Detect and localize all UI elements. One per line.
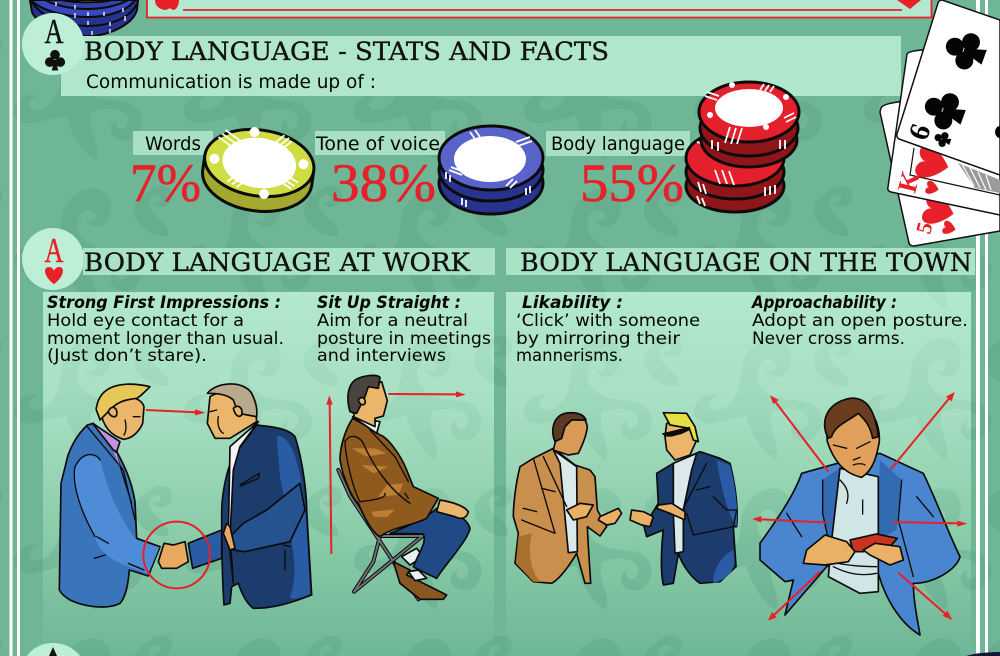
stat: body language: 55%	[580, 153, 684, 213]
folding chair	[338, 470, 425, 599]
six of clubs card	[897, 0, 1000, 175]
king of hearts card	[888, 50, 1000, 215]
stat: tone of voice: 38%	[331, 153, 436, 213]
king of hearts card: K	[892, 168, 926, 195]
sunglasses man	[630, 413, 737, 585]
arrow: lower left	[768, 572, 820, 621]
tip: strong first impressions	[47, 293, 284, 366]
stat: words	[130, 131, 213, 213]
fanned playing cards	[880, 0, 1000, 246]
arrow: upper right	[891, 392, 955, 469]
town heading banner: BODY LANGUAGE ON THE TOWN	[520, 248, 972, 277]
five of hearts card	[880, 80, 1000, 246]
tip: likability: by mirroring their	[516, 329, 680, 349]
tip: likability: mannerisms.	[516, 346, 623, 366]
green poker chip	[198, 121, 319, 218]
seated posture illustration	[326, 375, 470, 599]
arrow: lower right	[898, 573, 952, 620]
panel: on the town	[506, 292, 971, 655]
arrow: eye contact	[146, 409, 205, 415]
arrow: gaze line	[388, 391, 466, 397]
top card panel fragment	[147, 0, 932, 18]
stat: words: 7%	[130, 153, 201, 213]
top blue chip stack	[30, 0, 138, 36]
right border stripes	[976, 0, 988, 656]
panel: at work	[43, 292, 494, 655]
five of hearts card: 5	[911, 219, 938, 236]
tip: approachability: Approachability :	[750, 293, 897, 313]
handshake hands	[158, 542, 188, 568]
stats banner	[61, 36, 901, 96]
club icon	[45, 50, 65, 70]
gray-haired man	[188, 384, 312, 608]
stats intro: Communication is made up of :	[86, 71, 376, 93]
heart icon	[45, 267, 63, 284]
conversation illustration	[513, 392, 967, 635]
arrow: vertical back line	[326, 395, 333, 554]
tip: strong first impressions: Hold eye contact for a	[47, 311, 244, 331]
seated man	[340, 375, 470, 599]
tip: approachability: Never cross arms.	[752, 329, 905, 349]
tip: sit up straight	[317, 293, 491, 366]
blue poker chip	[439, 126, 543, 214]
upper red stack	[699, 82, 799, 167]
stat: tone of voice	[315, 131, 445, 213]
arrow: upper left	[770, 395, 828, 472]
stat: body language: Body language	[551, 133, 685, 155]
arrow: left	[752, 516, 828, 523]
red poker chip stacks	[686, 82, 799, 212]
tip: likability: Likability :	[522, 293, 623, 313]
tip: strong first impressions: (Just don’t stare).	[47, 346, 207, 366]
arrow: right	[893, 521, 967, 527]
tip: sit up straight: Aim for a neutral	[317, 311, 468, 331]
left border stripes	[10, 0, 20, 656]
ace of hearts badge	[22, 228, 84, 290]
tip: strong first impressions: Strong First Impressions :	[47, 293, 281, 313]
tip: likability	[516, 293, 700, 366]
tan jacket man	[513, 413, 622, 583]
ace of clubs badge	[22, 12, 84, 75]
handshake highlight circle	[143, 522, 210, 588]
tip: sit up straight: and interviews	[317, 346, 446, 366]
lower red stack	[686, 130, 784, 212]
blonde man	[59, 384, 160, 607]
tip: approachability: Adopt an open posture.	[752, 311, 968, 331]
handshake illustration	[59, 384, 312, 608]
tip: sit up straight: posture in meetings	[317, 329, 491, 349]
tip: approachability	[750, 293, 968, 349]
stats heading: BODY LANGUAGE - STATS AND FACTS	[84, 37, 609, 66]
stat: body language	[546, 131, 690, 213]
tip: sit up straight: Sit Up Straight :	[317, 293, 461, 313]
bottom chip fragment	[966, 652, 1000, 656]
bottom ace badge fragment	[27, 643, 80, 656]
stat: tone of voice: Tone of voice	[315, 133, 440, 155]
work heading banner: BODY LANGUAGE AT WORK	[84, 248, 471, 277]
tip: likability: ‘Click’ with someone	[516, 311, 700, 331]
tip: strong first impressions: moment longer than usual.	[47, 329, 284, 349]
ace letter: A	[44, 12, 64, 51]
six of clubs card: 6	[903, 120, 938, 144]
ace letter: A	[44, 231, 64, 270]
stat: words: Words	[145, 133, 201, 155]
card player man	[760, 398, 960, 635]
